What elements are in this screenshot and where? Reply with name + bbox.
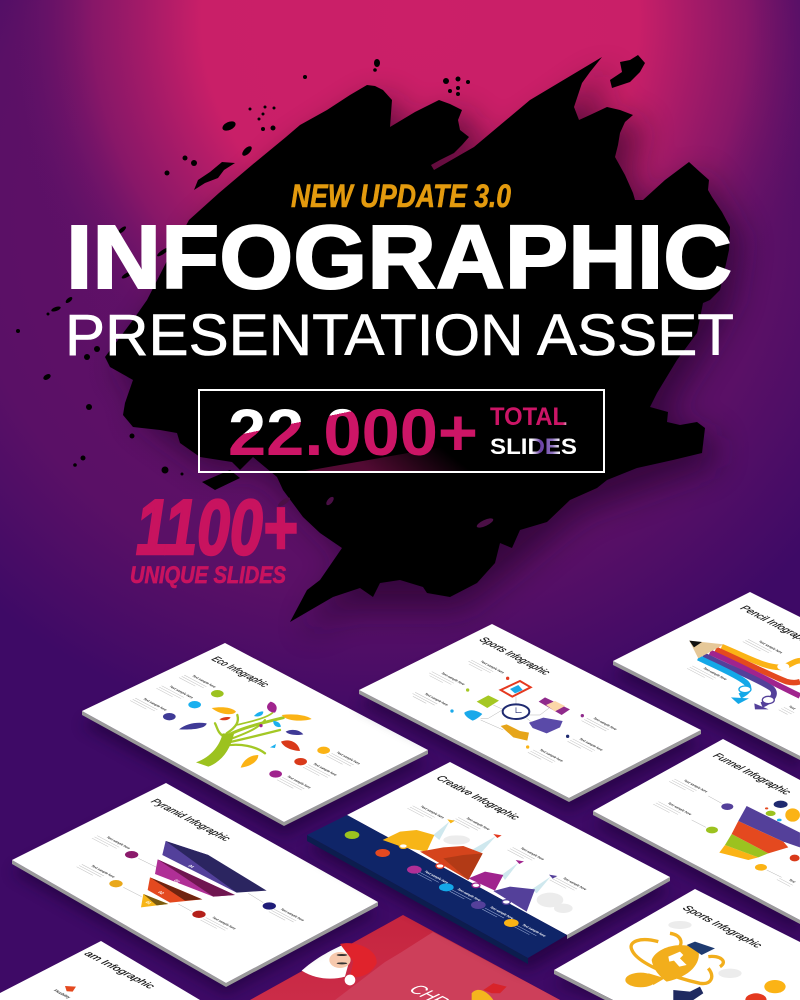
chart: pyramid: 04	[187, 864, 196, 869]
slide: sports infographic center: Text sample here	[440, 672, 466, 686]
total slides box: SLIDES	[490, 434, 577, 459]
slide: funnel infographic: Text sample here	[666, 802, 693, 816]
slide: diagram infographic bottom left: Flexibility	[52, 989, 73, 999]
total slides box	[199, 390, 604, 472]
slide: funnel infographic: Text sample here	[682, 779, 709, 793]
slide: pencil infographic	[613, 592, 800, 770]
slide: creative infographic: Creative Infographic	[432, 775, 522, 821]
icon: tree	[179, 702, 312, 768]
slide: pyramid infographic: Text sample here	[211, 916, 237, 930]
slide: funnel infographic: Text	[787, 879, 797, 884]
unique slides callout: UNIQUE SLIDES	[130, 562, 286, 589]
slide: sports infographic bottom	[554, 889, 800, 1000]
mountains	[383, 819, 573, 913]
slide: creative infographic: Text sample here	[519, 847, 546, 861]
slide: pyramid infographic: Pyramid Infographic	[147, 798, 233, 843]
slide: sports infographic bottom: Sports Infographic	[679, 905, 765, 949]
slide: pyramid infographic: Text sample here	[105, 836, 132, 850]
slide: pyramid infographic: Text sample here	[279, 908, 306, 922]
unique slides callout	[130, 483, 297, 589]
slide: eco infographic	[82, 643, 428, 836]
slide: eco infographic: Text sample here	[168, 685, 195, 699]
total slides box: TOTAL	[490, 403, 567, 431]
icon: sports set	[464, 681, 570, 741]
timeline markers	[345, 831, 519, 927]
slide: sports infographic center: Sports Infographic	[475, 636, 553, 677]
slide: pyramid infographic: Text sample here	[90, 865, 116, 878]
slide: eco infographic: Text sample here	[191, 675, 217, 688]
slide: sports infographic center: Text sample here	[538, 749, 565, 762]
slide: sports infographic center: Text sample here	[592, 717, 618, 731]
slide: diagram infographic bottom left	[0, 941, 200, 1000]
slide: funnel infographic	[593, 739, 800, 934]
slide: christmas	[250, 915, 560, 1000]
slide: pyramid infographic	[12, 783, 378, 995]
slide: sports infographic center: Text sample here	[423, 693, 450, 706]
slide: funnel infographic: Funnel Infographic	[709, 752, 794, 796]
slide: pencil infographic: Text sample here	[702, 667, 728, 681]
slide: creative infographic: Text sample here	[419, 805, 446, 819]
slide: creative infographic: Text sample here	[465, 817, 491, 831]
slide: creative infographic: Text sample here	[488, 906, 515, 920]
unique slides callout: 1100+	[136, 483, 297, 571]
black brush stroke	[16, 55, 742, 634]
slide: creative infographic: Text sample here	[456, 888, 482, 902]
slide: sports infographic center: Text sample here	[578, 738, 604, 751]
slide: eco infographic: Text sample here	[286, 775, 312, 789]
slide: diagram infographic bottom left: am Infographic	[80, 950, 158, 990]
slide: creative infographic	[307, 762, 670, 971]
slide: pencil infographic: Text sample here	[757, 640, 784, 654]
chart: funnel	[719, 806, 800, 860]
slide: eco infographic: Text sample here	[312, 763, 338, 776]
total slides box: 22.000+	[228, 395, 478, 469]
slide: sports infographic center: Text sample here	[479, 660, 506, 674]
icon: trophy	[625, 933, 723, 1000]
sub heading: PRESENTATION ASSET	[65, 303, 734, 368]
slide: creative infographic: Text sample here	[561, 877, 588, 891]
slide: eco infographic: Text sample here	[335, 751, 362, 765]
chart: pyramid	[141, 841, 267, 907]
chart: pyramid: 01	[144, 900, 153, 905]
main heading: INFOGRAPHIC	[66, 208, 732, 308]
chart: pyramid: 02	[157, 890, 166, 895]
slide: sports infographic center	[359, 624, 701, 812]
chart: pyramid: 03	[172, 879, 182, 883]
slide: eco infographic: Eco Infographic	[208, 656, 272, 689]
slide: creative infographic: Text sample here	[521, 924, 547, 937]
slide: creative infographic: Text sample here	[423, 870, 450, 884]
slide: pencil infographic: Text	[787, 705, 797, 710]
slide: eco infographic: Text sample here	[142, 698, 168, 711]
update tag: NEW UPDATE 3.0	[291, 178, 511, 214]
